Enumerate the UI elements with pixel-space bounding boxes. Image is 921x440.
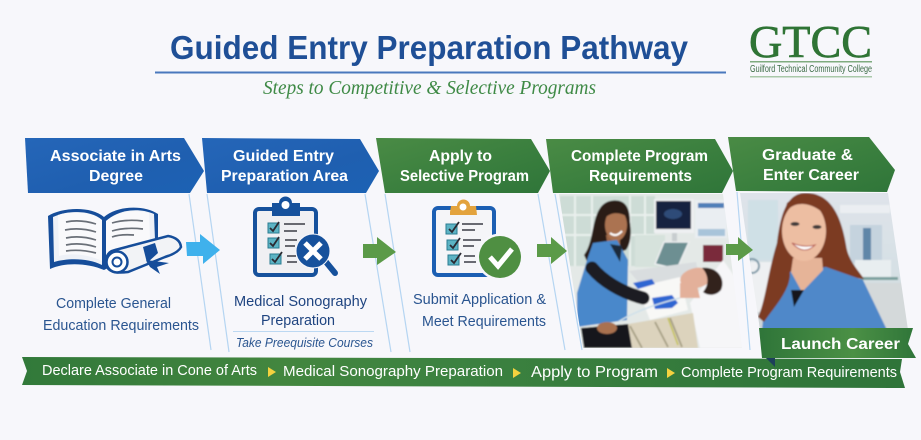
patient gown [637, 277, 688, 320]
heading banner: Requirements [589, 168, 692, 185]
patient blanket [627, 312, 698, 348]
arrow: green 3 [726, 237, 753, 261]
heading banner: Degree [89, 168, 143, 185]
body text: Preparation [261, 313, 335, 329]
tablet [655, 242, 689, 269]
heading banner [376, 138, 550, 193]
body text [234, 294, 368, 329]
body text [43, 296, 199, 334]
heading banner: Graduate & [762, 147, 853, 164]
scrubs [762, 267, 887, 330]
icon: open book and diploma [48, 208, 181, 274]
pathway ribbon: Apply to Program [531, 364, 658, 381]
body text: Meet Requirements [422, 314, 546, 330]
GTCC logo: GTCC [749, 16, 872, 67]
patient face and hair [680, 267, 709, 288]
icon: clipboard with check [434, 200, 524, 280]
neck [791, 258, 823, 292]
heading banner: Associate in Arts [50, 148, 181, 165]
side display [695, 200, 727, 238]
photo: sonographer with patient [555, 190, 745, 350]
arrow: green 1 [363, 237, 396, 265]
pathway ribbon: Declare Associate in Cone of Arts [42, 362, 257, 379]
heading banner [546, 139, 733, 193]
body text: Medical Sonography [234, 294, 368, 310]
infographic [22, 26, 916, 388]
arrow: blue [186, 234, 220, 264]
body text [413, 292, 546, 330]
body text: Education Requirements [43, 318, 199, 334]
hair lock left [758, 240, 790, 322]
panel: graduate and enter career [728, 137, 913, 332]
heading banner [202, 138, 379, 193]
title rule [155, 72, 726, 74]
heading banner: Enter Career [763, 167, 859, 184]
nurse sleeve [592, 268, 643, 298]
pathway ribbon: Complete Program Requirements [681, 364, 897, 381]
pathway ribbon: Medical Sonography Preparation [283, 363, 503, 380]
pathway ribbon [22, 357, 905, 388]
note: prerequisite courses: Take Preequisite Courses [236, 335, 373, 350]
arrow: green 2 [537, 237, 567, 264]
icon: clipboard with magnifier [255, 196, 335, 275]
photo: graduate in scrubs [738, 190, 913, 332]
gloves [652, 295, 678, 309]
heading banner: Apply to [429, 148, 492, 165]
GTCC logo: Guilford Technical Community College [750, 64, 872, 75]
patient neck [680, 283, 700, 298]
face [782, 201, 826, 261]
nurse scrubs [577, 240, 628, 327]
pillow [690, 260, 745, 348]
launch career banner: Launch Career [781, 336, 900, 353]
nurse hair [584, 200, 631, 268]
panel: apply to program [376, 138, 550, 330]
hair back [775, 193, 864, 279]
heading banner: Complete Program [571, 148, 708, 165]
heading banner: Guided Entry [233, 148, 334, 165]
title: Guided Entry Preparation Pathway [170, 29, 689, 66]
nurse pants [581, 324, 632, 348]
panel: complete program requirements [546, 139, 745, 350]
ultrasound console [630, 262, 696, 282]
panel: guided entry preparation [202, 138, 379, 350]
heading banner: Selective Program [400, 168, 529, 185]
heading banner: Preparation Area [221, 168, 348, 185]
column divider lines [189, 192, 750, 352]
nurse neck and face [606, 235, 620, 248]
body text: Submit Application & [413, 292, 546, 308]
heading banner [728, 137, 895, 192]
body text: Complete General [56, 296, 171, 312]
heading banner [25, 138, 204, 193]
subtitle: Steps to Competitive & Selective Programs [263, 77, 596, 99]
ultrasound monitor [654, 199, 694, 233]
eyes and smile [790, 222, 800, 226]
launch career banner [759, 328, 916, 367]
panel: associate degree [25, 138, 204, 334]
